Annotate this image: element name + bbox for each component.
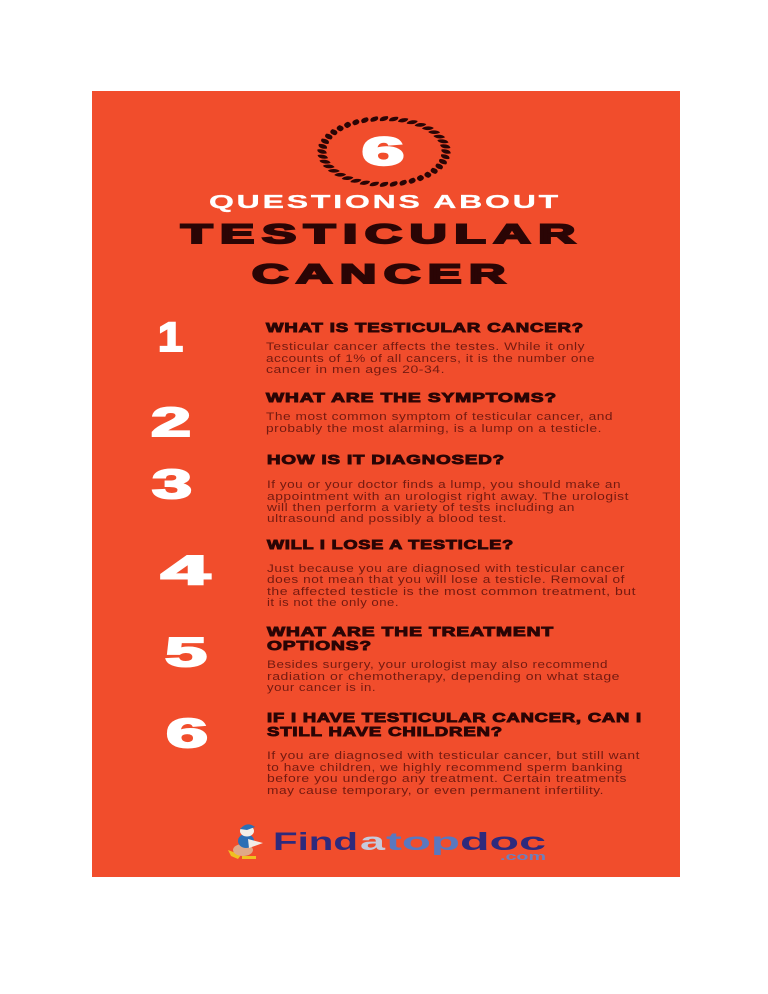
number 3: 3: [152, 461, 192, 507]
body 1: cancer in men ages 20-34.: [266, 364, 445, 376]
heading 4: WILL I LOSE A TESTICLE?: [267, 537, 514, 552]
icon: dotted ring: [315, 115, 453, 188]
number 2: 2: [151, 399, 191, 445]
number 1: 1: [158, 314, 183, 360]
body 1: accounts of 1% of all cancers, it is the number one: [266, 353, 595, 365]
heading 2: WHAT ARE THE SYMPTOMS?: [266, 390, 557, 405]
heading 6: [267, 710, 642, 739]
body 6: before you undergo any treatment. Certain treatments: [267, 773, 627, 785]
ring number 6: 6: [362, 130, 404, 174]
body 5: Besides surgery, your urologist may also recommend: [267, 659, 608, 671]
body 3: ultrasound and possibly a blood test.: [267, 513, 507, 525]
body 5: radiation or chemotherapy, depending on what stage: [267, 671, 620, 683]
number 4: 4: [161, 547, 210, 593]
subtitle: QUESTIONS ABOUT: [209, 192, 561, 212]
body 6: to have children, we highly recommend sperm banking: [267, 762, 623, 774]
question 4: [161, 537, 636, 609]
question 5: [165, 624, 620, 694]
number 6: 6: [166, 710, 208, 756]
heading 6: IF I HAVE TESTICULAR CANCER, CAN I: [267, 710, 642, 725]
question 6: [166, 710, 642, 797]
body 3: If you or your doctor finds a lump, you should make an: [267, 479, 621, 491]
title line 2: CANCER: [252, 259, 513, 289]
question 2: [151, 390, 613, 445]
panel: orange background: [92, 91, 680, 877]
heading 5: WHAT ARE THE TREATMENT: [267, 624, 554, 639]
body 2: [266, 411, 613, 435]
body 6: If you are diagnosed with testicular cancer, but still want: [267, 750, 640, 762]
heading 3: HOW IS IT DIAGNOSED?: [267, 452, 505, 467]
number 5: 5: [165, 629, 207, 675]
heading 5: [267, 624, 554, 653]
header block: [181, 115, 583, 289]
question 3: [152, 452, 629, 525]
wordmark: Find: [273, 828, 358, 856]
body 3: will then perform a variety of tests including an: [266, 502, 575, 514]
body 6: may cause temporary, or even permanent infertility.: [267, 785, 604, 797]
logo: doc: [460, 828, 546, 856]
logo: [228, 824, 546, 863]
body 5: [267, 659, 620, 694]
body 4: does not mean that you will lose a testicle. Removal of: [267, 574, 625, 586]
question 1: [158, 314, 595, 376]
body 5: your cancer is in.: [267, 682, 376, 694]
body 4: [267, 563, 636, 609]
heading 5: OPTIONS?: [267, 638, 372, 653]
body 3: [266, 479, 629, 525]
body 4: the affected testicle is the most common treatment, but: [267, 586, 636, 598]
body 2: The most common symptom of testicular cancer, and: [266, 411, 613, 423]
body 2: probably the most alarming, is a lump on a testicle.: [266, 423, 602, 435]
title line 1: TESTICULAR: [181, 219, 583, 249]
logo: .com: [500, 851, 546, 863]
body 6: [267, 750, 640, 797]
body 1: [266, 341, 595, 376]
body 3: appointment with an urologist right away. The urologist: [267, 491, 629, 503]
heading 1: WHAT IS TESTICULAR CANCER?: [266, 320, 584, 335]
icon: duck mascot: [228, 824, 263, 859]
logo: top: [386, 828, 460, 856]
body 1: Testicular cancer affects the testes. While it only: [266, 341, 585, 353]
body 4: it is not the only one.: [267, 597, 399, 609]
body 4: Just because you are diagnosed with testicular cancer: [267, 563, 625, 575]
logo: a: [360, 828, 387, 856]
heading 6: STILL HAVE CHILDREN?: [267, 724, 503, 739]
